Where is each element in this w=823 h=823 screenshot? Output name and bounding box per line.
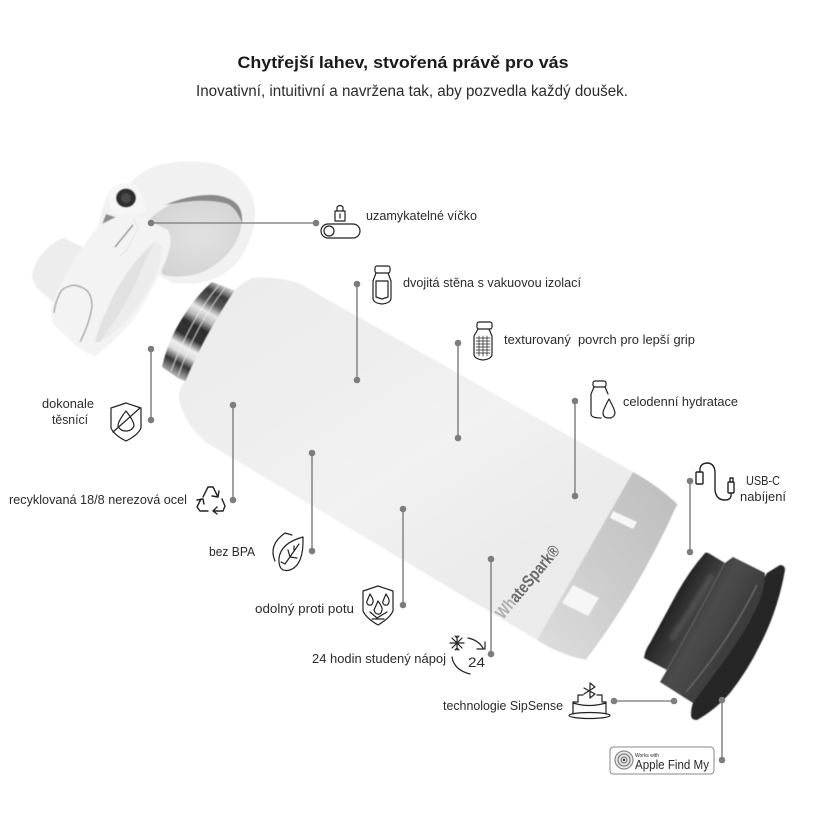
icon: seal shield	[111, 403, 141, 441]
threaded neck	[162, 282, 239, 382]
logo: WhateSpark®	[492, 541, 564, 623]
labels: uzamykatelné víčko	[366, 209, 477, 223]
title: Chytřejší lahev, stvořená právě pro vás	[238, 54, 568, 72]
labels: bez BPA	[209, 545, 256, 559]
labels: těsnící	[52, 413, 89, 427]
Apple Find My badge: Apple Find My	[635, 758, 710, 772]
icon: recycle	[197, 487, 225, 514]
icon: SipSense bluetooth base	[569, 683, 610, 718]
labels: celodenní hydratace	[623, 395, 738, 409]
labels: dokonale	[42, 397, 94, 411]
icon: textured bottle	[474, 322, 492, 360]
icon: double wall bottle	[373, 266, 391, 304]
labels: texturovaný povrch pro lepší grip	[504, 333, 695, 347]
icon: sweat shield	[363, 586, 393, 625]
base with sensor	[644, 553, 785, 720]
labels: odolný proti potu	[255, 602, 354, 616]
icon: cold 24 hours	[450, 636, 485, 674]
bottle body	[162, 278, 678, 660]
icon: USB-C cable	[696, 463, 734, 500]
icon: cold 24 hours: 24	[468, 654, 485, 670]
bottom windows	[562, 511, 637, 616]
Apple Find My badge: Works with	[635, 753, 659, 759]
Apple Find My badge	[610, 747, 714, 774]
icon: leaf	[273, 533, 303, 570]
open lid	[32, 161, 255, 357]
labels: 24 hodin studený nápoj	[312, 652, 446, 666]
labels: technologie SipSense	[443, 699, 563, 713]
subtitle: Inovativní, intuitivní a navržena tak, aby pozvedla každý doušek.	[196, 83, 628, 100]
icon: lock toggle	[321, 206, 360, 238]
icons	[111, 206, 734, 718]
labels: dvojitá stěna s vakuovou izolací	[403, 276, 582, 290]
labels: recyklovaná 18/8 nerezová ocel	[9, 493, 187, 507]
labels	[9, 209, 787, 713]
labels: USB-C	[746, 474, 780, 488]
labels: nabíjení	[740, 490, 787, 504]
connector lines	[148, 220, 725, 763]
icon: bottle with drop	[591, 381, 615, 418]
